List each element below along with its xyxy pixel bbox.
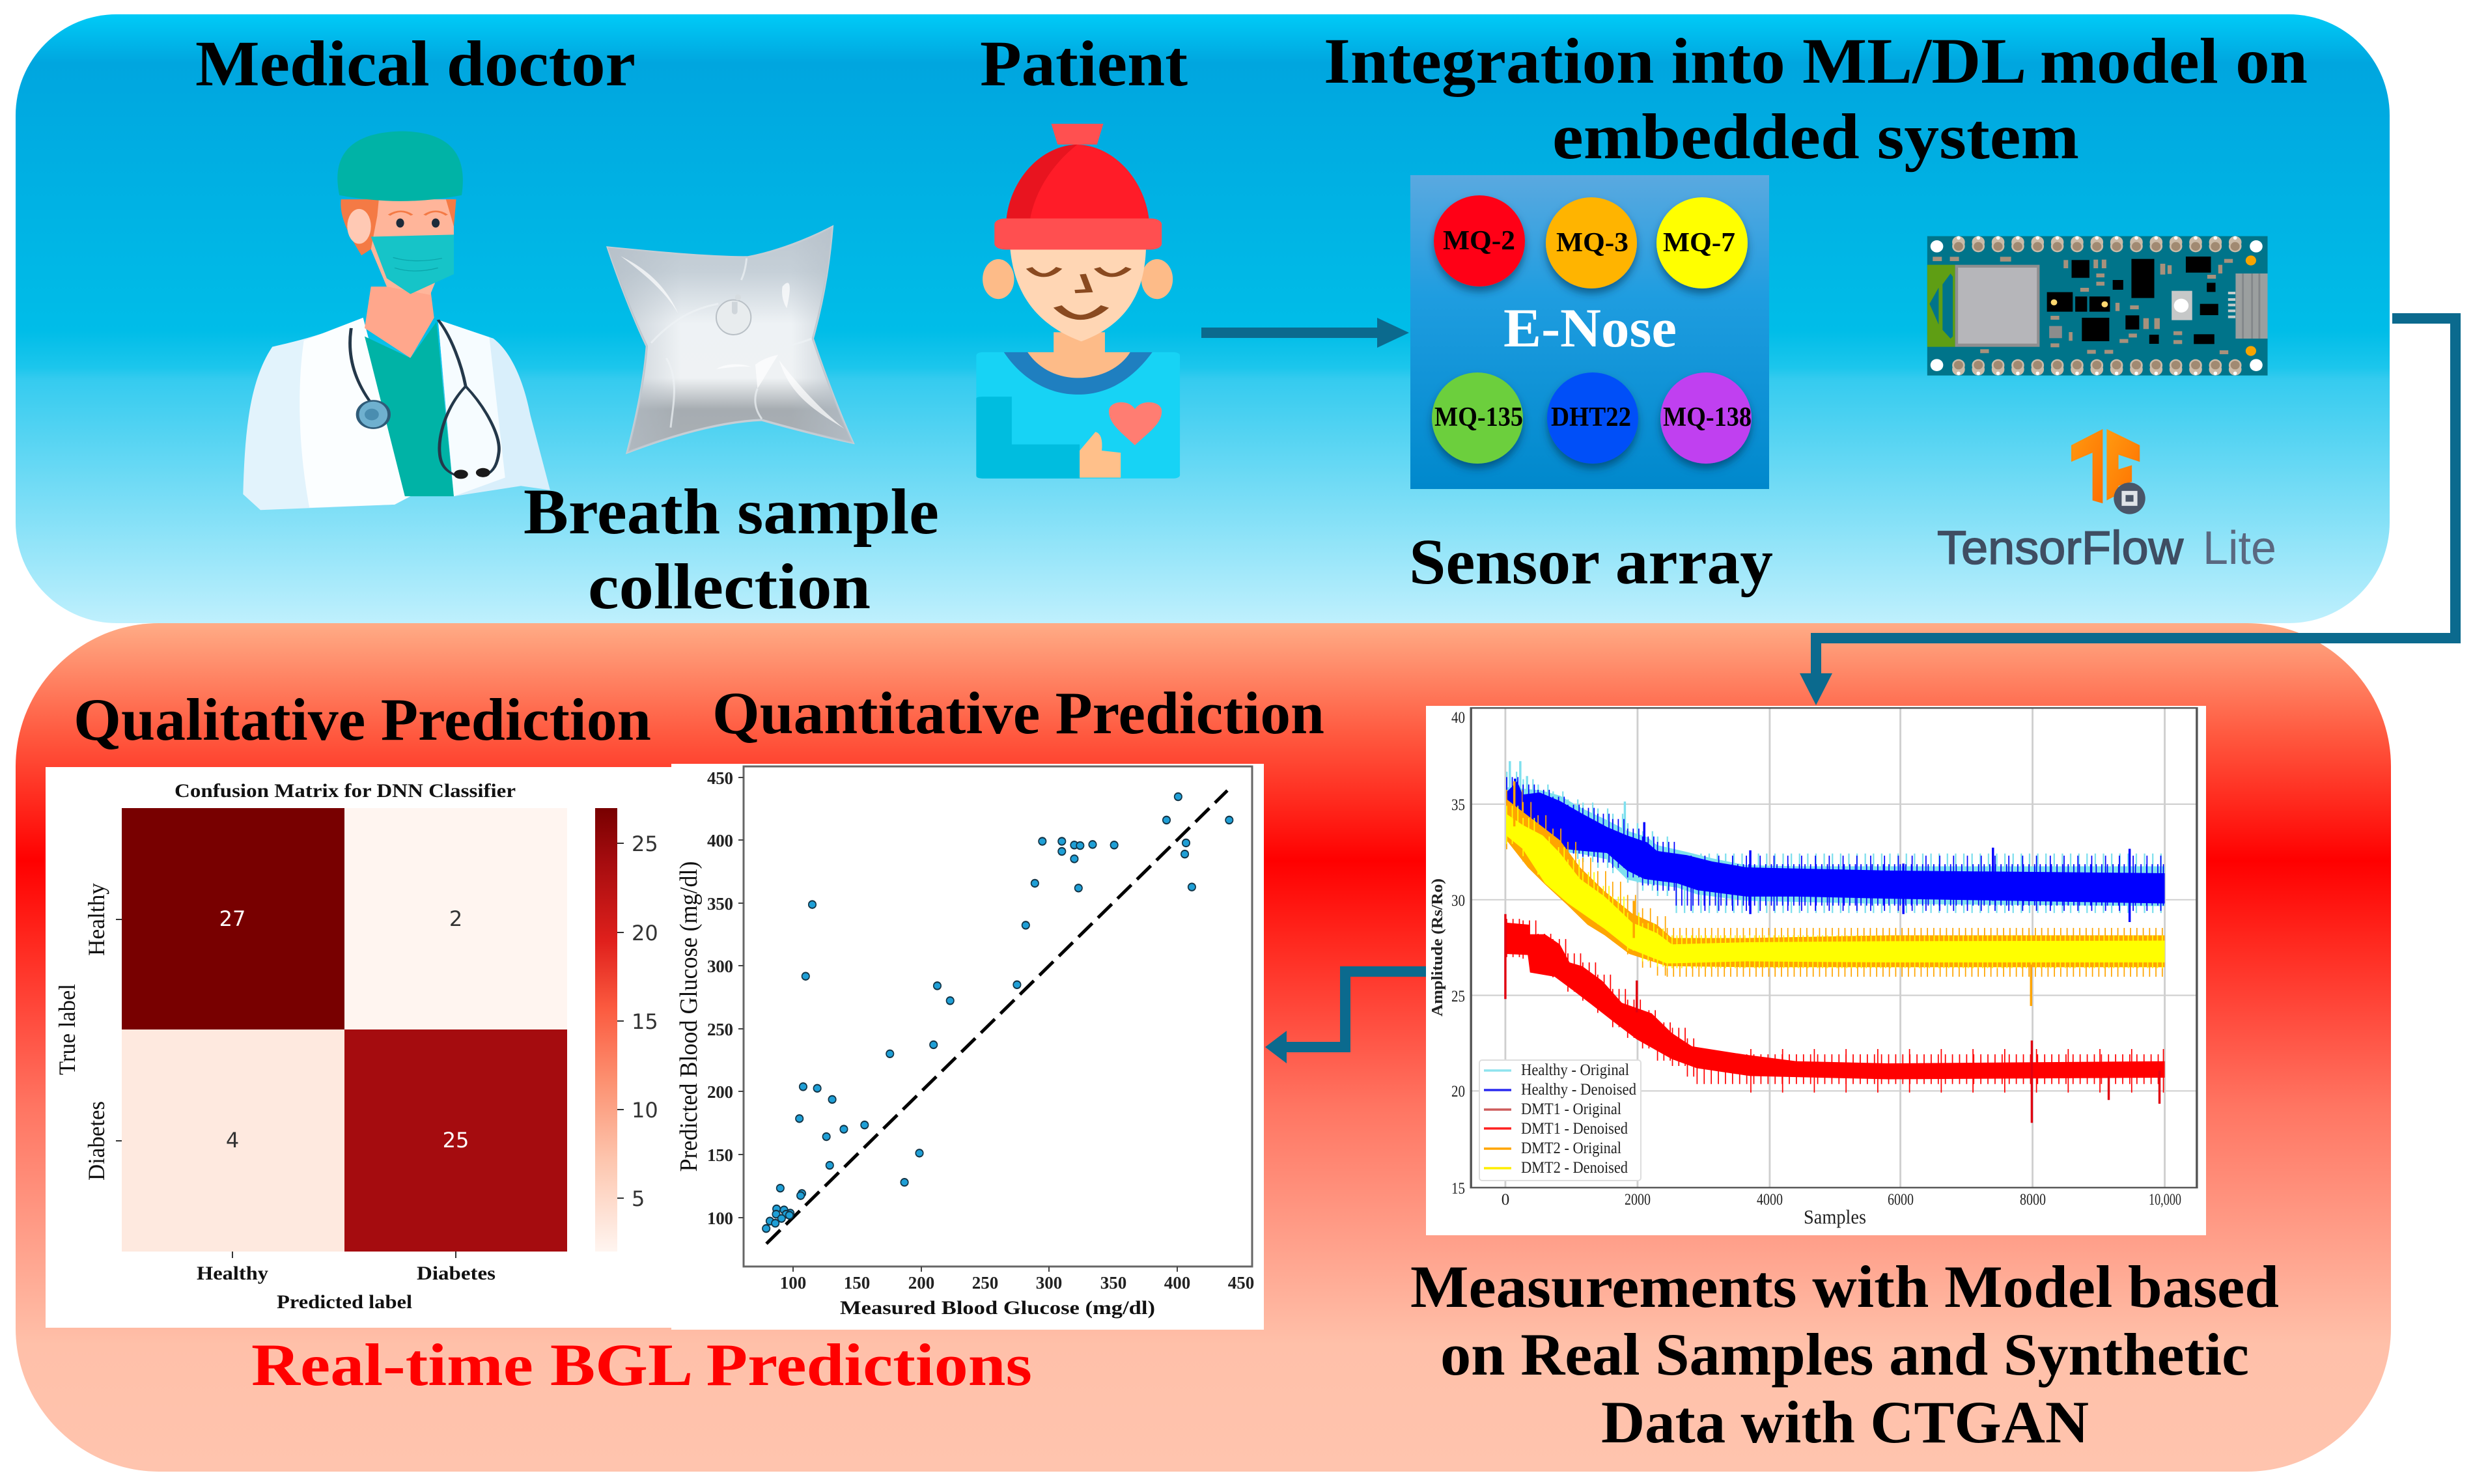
y tick labels: 200: [707, 1082, 733, 1102]
title: breath sample collection: Breath sample: [524, 475, 939, 548]
y axis labels: [54, 883, 122, 1181]
x axis labels: [197, 1252, 496, 1313]
legend: DMT2 - Original: [1521, 1140, 1621, 1157]
panel: predictions and measurements: [16, 623, 2391, 1472]
x tick labels: 100: [780, 1273, 806, 1293]
x tick labels: 4000: [1757, 1191, 1783, 1209]
sensor: MQ-2: MQ-2: [1443, 226, 1515, 256]
x tick labels: 450: [1228, 1273, 1254, 1293]
heatmap cells: 2: [449, 906, 462, 931]
axis title: measured: Measured Blood Glucose (mg/dl): [840, 1297, 1155, 1319]
axis title: predicted: Predicted Blood Glucose (mg/dl): [675, 861, 703, 1172]
y tick labels: 35: [1451, 796, 1465, 814]
axis title: samples: Samples: [1804, 1205, 1866, 1228]
x tick labels: 400: [1164, 1273, 1190, 1293]
arrow: embedded system to measurements: [1800, 318, 2455, 705]
y tick labels: [1451, 709, 1465, 1197]
y tick labels: 300: [707, 957, 733, 976]
x tick labels: 0: [1502, 1191, 1509, 1209]
title: measurements caption: Measurements with Model based: [1410, 1253, 2279, 1320]
title: quantitative prediction: Quantitative Prediction: [712, 680, 1324, 746]
sensor: MQ-135: [1432, 372, 1523, 464]
y tick labels: [707, 768, 744, 1228]
title: qualitative prediction: Qualitative Prediction: [74, 686, 651, 753]
colorbar: [595, 808, 658, 1252]
y tick labels: 150: [707, 1145, 733, 1165]
legend: DMT1 - Original: [1521, 1100, 1621, 1118]
x axis labels: Diabetes: [417, 1263, 496, 1284]
y tick labels: 25: [1451, 988, 1465, 1005]
icon: breath sample bag: [608, 227, 853, 453]
sensor: MQ-138: [1660, 372, 1752, 464]
sensor: DHT22: DHT22: [1551, 402, 1631, 432]
x tick labels: 6000: [1888, 1191, 1914, 1209]
x tick labels: 150: [844, 1273, 870, 1293]
label: TensorFlow Lite: TensorFlow: [1937, 522, 2184, 574]
icon: doctor: [243, 132, 550, 510]
title: measurements caption: Data with CTGAN: [1601, 1389, 2089, 1455]
chart: confusion matrix: [46, 767, 671, 1328]
colorbar: 25: [632, 832, 658, 856]
legend: DMT1 - Denoised: [1521, 1120, 1628, 1138]
sensor: MQ-135: MQ-135: [1434, 402, 1523, 432]
title: measurements caption: on Real Samples and Synthetic: [1440, 1321, 2249, 1388]
title: integration into model: embedded system: [1552, 100, 2079, 173]
y tick labels: 350: [707, 894, 733, 914]
scatter points: [762, 793, 1233, 1232]
title: integration into model: [1324, 25, 2308, 173]
legend: Healthy - Original: [1521, 1061, 1629, 1079]
x tick labels: 250: [972, 1273, 998, 1293]
y tick labels: 450: [707, 768, 733, 788]
x tick labels: 8000: [2020, 1191, 2046, 1209]
title: medical doctor: Medical doctor: [195, 27, 636, 100]
sensor: MQ-138: MQ-138: [1663, 402, 1752, 432]
x tick labels: 10,000: [2149, 1191, 2181, 1209]
x tick labels: 300: [1036, 1273, 1062, 1293]
chart: predicted vs measured scatter: [671, 764, 1264, 1330]
x axis labels: Predicted label: [277, 1291, 412, 1313]
label: TensorFlow Lite: Lite: [2203, 522, 2276, 574]
arrow: measurements to predictions: [1265, 972, 1426, 1063]
icon: embedded board: [1927, 236, 2268, 376]
icon: patient: [976, 124, 1180, 479]
y axis labels: Diabetes: [83, 1101, 109, 1181]
identity line: [766, 791, 1227, 1244]
heatmap cells: 4: [226, 1128, 239, 1153]
colorbar: 5: [632, 1186, 645, 1211]
arrow: patient to e-nose: [1201, 318, 1409, 348]
sensor: MQ-2: [1434, 195, 1525, 287]
chart title: Confusion Matrix for DNN Classifier: [175, 780, 516, 802]
x tick labels: 350: [1100, 1273, 1126, 1293]
sensor: DHT22: [1547, 372, 1638, 464]
panel: e-nose sensor array: [1410, 175, 1769, 489]
title: breath sample collection: collection: [588, 550, 871, 623]
legend: [1479, 1060, 1641, 1181]
y tick labels: 15: [1451, 1180, 1465, 1197]
heatmap cells: 27: [219, 906, 245, 931]
axis title: amplitude: Amplitude (Rs/Ro): [1429, 878, 1446, 1016]
x axis labels: Healthy: [197, 1263, 268, 1284]
colorbar: 10: [632, 1098, 658, 1123]
heatmap cells: 25: [443, 1128, 469, 1153]
x tick labels: 2000: [1625, 1191, 1651, 1209]
y tick labels: 20: [1451, 1083, 1465, 1100]
heatmap cells: [122, 808, 567, 1252]
icon: tensorflow logo: [2071, 429, 2145, 514]
y axis labels: True label: [54, 984, 80, 1075]
x tick labels: [780, 1267, 1254, 1293]
label: E-Nose: E-Nose: [1503, 298, 1677, 359]
title: patient: Patient: [980, 27, 1188, 100]
chart: sensor amplitude time series: [1426, 706, 2206, 1235]
legend: Healthy - Denoised: [1521, 1081, 1636, 1099]
sensor: MQ-7: MQ-7: [1663, 228, 1735, 258]
y tick labels: 100: [707, 1209, 733, 1228]
legend: DMT2 - Denoised: [1521, 1159, 1628, 1177]
title: integration into model: Integration into ML/DL model on: [1324, 25, 2308, 97]
sensor: MQ-7: [1656, 197, 1748, 288]
y tick labels: 250: [707, 1020, 733, 1039]
x tick labels: 200: [908, 1273, 934, 1293]
panel: data acquisition: [16, 14, 2390, 623]
sensor: MQ-3: MQ-3: [1556, 228, 1628, 258]
sensor: MQ-3: [1546, 197, 1637, 288]
colorbar: 15: [632, 1009, 658, 1034]
title: sensor array: Sensor array: [1409, 525, 1773, 598]
plot area with noisy signals: [1471, 708, 2197, 1188]
y tick labels: 40: [1451, 709, 1465, 727]
title: measurements caption: [1410, 1253, 2279, 1455]
y tick labels: 400: [707, 831, 733, 850]
y tick labels: 30: [1451, 892, 1465, 910]
y axis labels: Healthy: [83, 883, 109, 956]
title: real-time BGL predictions: Real-time BGL Predictions: [251, 1332, 1032, 1398]
title: breath sample collection: [524, 475, 939, 623]
colorbar: 20: [632, 921, 658, 945]
x tick labels: [1502, 1191, 2181, 1209]
